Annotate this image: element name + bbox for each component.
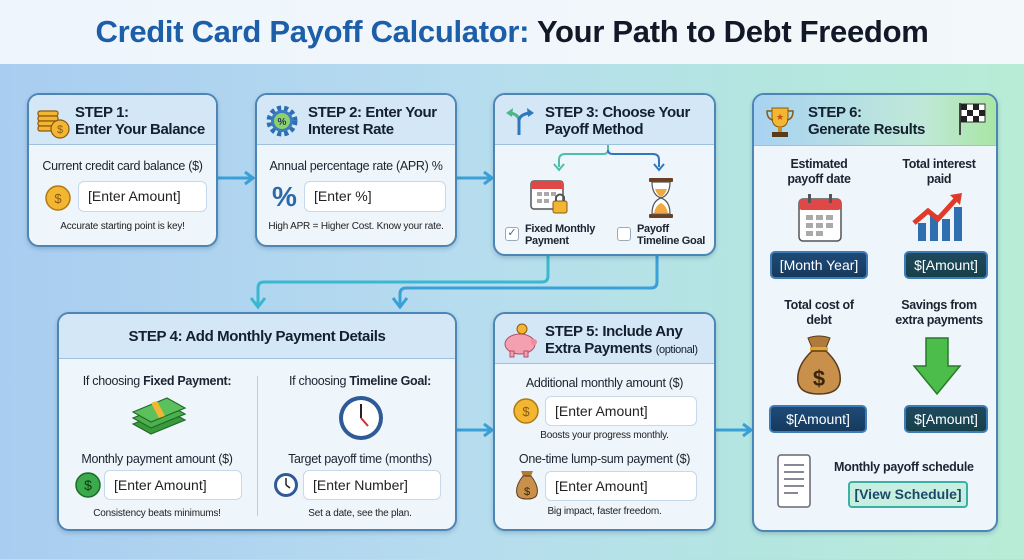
- heading: STEP 4: Add Monthly Payment Details: [129, 328, 385, 345]
- option: fixed monthly: Fixed Monthly: [525, 223, 595, 235]
- branch arrows: [553, 145, 665, 172]
- result: total cost: debt: [806, 313, 832, 327]
- panel: step 5: [493, 312, 716, 531]
- icon: gear percent: %: [278, 117, 287, 128]
- result: total cost: $[Amount]: [786, 411, 850, 427]
- panel: step 1: [Enter Amount]: [88, 188, 181, 204]
- heading: STEP 1:: [75, 104, 129, 121]
- option: timeline goal: [617, 223, 705, 247]
- option: timeline goal: Payoff: [637, 223, 669, 235]
- icon: hourglass: [649, 178, 673, 218]
- result: total cost: Total cost of: [784, 298, 854, 312]
- icon: piggy bank: [504, 324, 537, 358]
- heading: Enter Your Balance: [75, 121, 205, 138]
- column: fixed payment: [75, 374, 242, 519]
- icon: small clock: [274, 473, 298, 497]
- heading: [545, 104, 690, 138]
- column: timeline goal: If choosing Timeline Goal:: [289, 374, 431, 388]
- result: payoff date: [770, 157, 868, 279]
- heading: Generate Results: [808, 121, 925, 138]
- result: total cost: [769, 298, 867, 433]
- arrow: step1 to step2: [218, 170, 255, 186]
- result: payoff date: Estimated: [790, 157, 848, 171]
- heading: [808, 104, 925, 138]
- field: lump sum: One-time lump-sum payment ($): [519, 452, 690, 466]
- column: fixed payment: Consistency beats minimums!: [93, 508, 221, 519]
- heading: STEP 5: Include Any: [545, 323, 682, 340]
- panel: step 5: Boosts your progress monthly.: [540, 430, 669, 441]
- arrow: step5 to step6: [716, 422, 752, 438]
- column: timeline goal: [274, 374, 441, 519]
- panel: step 6: [752, 93, 998, 532]
- field: APR: Annual percentage rate (APR) %: [269, 159, 443, 173]
- result: total interest: Total interest: [902, 157, 976, 171]
- icon: coin stack: $: [57, 124, 63, 136]
- panel: step 1: [27, 93, 218, 247]
- icon: trophy: ★: [776, 112, 784, 122]
- icon: schedule scroll: [777, 454, 811, 508]
- option: timeline goal: Timeline Goal: [637, 235, 705, 247]
- panel: step 3: [493, 93, 716, 256]
- icon: checkered flag: [959, 103, 986, 135]
- column: timeline goal: [Enter Number]: [313, 477, 408, 493]
- option: fixed monthly: [505, 223, 596, 247]
- panel: step 1: Accurate starting point is key!: [60, 221, 185, 232]
- panel: step 2: [255, 93, 457, 247]
- icon: trophy: [766, 108, 794, 137]
- title bar: [0, 0, 1024, 64]
- button: view schedule: [848, 481, 968, 508]
- connector arrows: step3 to step4: [250, 256, 658, 310]
- arrow: step2 to step3: [457, 170, 493, 186]
- field: balance: Current credit card balance ($): [42, 159, 203, 173]
- column: timeline goal: Set a date, see the plan.: [308, 508, 412, 519]
- divider: [257, 376, 258, 516]
- panel: step 5: [Enter Amount]: [555, 478, 648, 494]
- heading: STEP 6:: [808, 104, 862, 121]
- field: additional monthly: Additional monthly amount ($): [526, 376, 683, 390]
- icon: coin stack: [37, 110, 70, 139]
- panel: step 5: Big impact, faster freedom.: [547, 506, 662, 517]
- icon: coin: $: [54, 191, 62, 206]
- result: savings: Savings from: [901, 298, 977, 312]
- column: timeline goal: Target payoff time (months): [288, 452, 432, 466]
- column: fixed payment: If choosing Fixed Payment:: [83, 374, 231, 388]
- column: fixed payment: [Enter Amount]: [114, 477, 207, 493]
- result: payoff date: [Month Year]: [780, 257, 858, 273]
- icon: percent: %: [272, 181, 297, 212]
- icon: dollar circle: $: [84, 477, 92, 493]
- column: fixed payment: Monthly payment amount ($): [81, 452, 233, 466]
- result: payoff date: payoff date: [787, 172, 851, 186]
- result: total interest: [902, 157, 988, 279]
- icon: calendar lock: [530, 180, 568, 214]
- heading: Interest Rate: [308, 121, 394, 138]
- icon: dollar circle: [75, 472, 101, 498]
- panel: step 2: [Enter %]: [314, 188, 372, 204]
- option: fixed monthly: ✓: [507, 227, 517, 239]
- icon: gear percent: [266, 106, 298, 136]
- icon: split arrows: [506, 108, 534, 135]
- arrow: step4 to step5: [457, 422, 493, 438]
- result: total cost: $: [813, 366, 825, 391]
- heading: Payoff Method: [545, 121, 643, 138]
- title bar: Credit Card Payoff Calculator: Your Path to Debt Freedom: [96, 14, 928, 49]
- heading: STEP 2: Enter Your: [308, 104, 437, 121]
- heading: STEP 3: Choose Your: [545, 104, 690, 121]
- heading: [545, 323, 698, 357]
- icon: clock: [339, 396, 383, 440]
- button: view schedule: [View Schedule]: [854, 486, 962, 502]
- icon: coin: [45, 185, 71, 211]
- heading: [75, 104, 205, 138]
- heading: Extra Payments (optional): [545, 340, 698, 357]
- icon: money bag: $: [524, 486, 530, 498]
- result: total interest: paid: [927, 172, 951, 186]
- result: savings: extra payments: [895, 313, 983, 327]
- icon: coin: [513, 398, 539, 424]
- icon: cash stack: [132, 397, 186, 435]
- result: total interest: $[Amount]: [914, 257, 978, 273]
- heading: [308, 104, 437, 138]
- option: fixed monthly: Payment: [525, 235, 569, 247]
- panel: step 5: [Enter Amount]: [555, 403, 648, 419]
- icon: coin: $: [522, 404, 530, 419]
- result: savings: [895, 298, 988, 433]
- panel: step 2: High APR = Higher Cost. Know your rate.: [268, 221, 444, 232]
- panel: step 4: [57, 312, 457, 531]
- result: savings: $[Amount]: [914, 411, 978, 427]
- icon: money bag: [516, 471, 538, 500]
- schedule label: Monthly payoff schedule: [834, 460, 974, 474]
